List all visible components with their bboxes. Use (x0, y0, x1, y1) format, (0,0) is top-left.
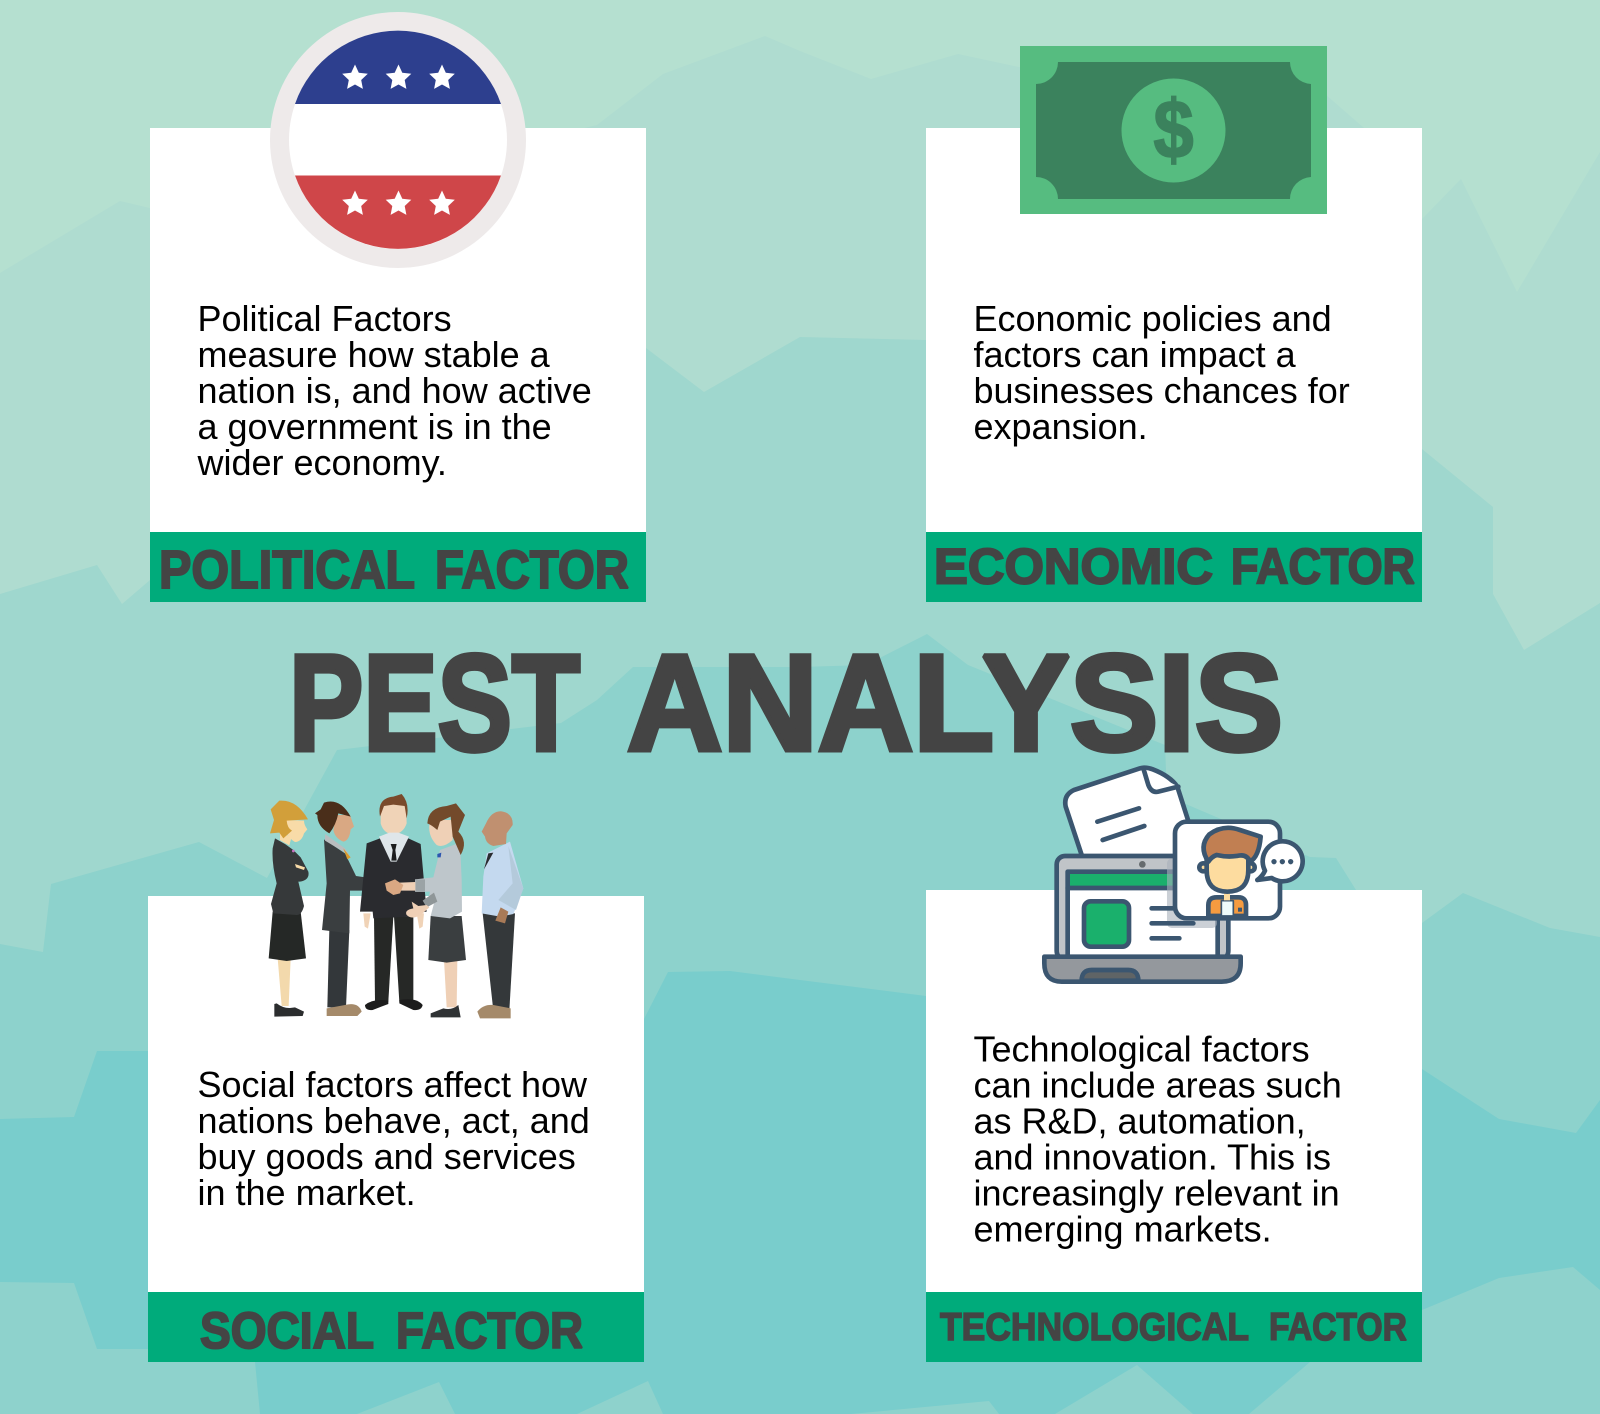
text: technological description: Technological factors (974, 1028, 1310, 1070)
title (289, 627, 1283, 780)
label bar: economic factor: FACTOR (1231, 538, 1415, 594)
label bar: social factor: FACTOR (396, 1302, 583, 1359)
text: political description: Political Factors (198, 298, 452, 339)
text: technological description: emerging markets. (974, 1208, 1272, 1250)
text: political description: nation is, and how active (198, 370, 592, 411)
label bar: economic factor (926, 532, 1422, 602)
speech bubble (1257, 841, 1303, 881)
text: technological description: and innovation. This is (974, 1136, 1331, 1178)
text: technological description: increasingly relevant in (974, 1172, 1340, 1214)
label bar: political factor: FACTOR (435, 540, 629, 600)
label bar: social factor: SOCIAL (200, 1302, 374, 1359)
icon: campaign badge with stars (270, 12, 526, 268)
person: blonde woman (269, 801, 309, 1017)
text: technological description: can include areas such (974, 1064, 1342, 1106)
text: economic description: businesses chances for (974, 370, 1350, 411)
icon: laptop, document and avatar (1044, 768, 1303, 982)
text: economic description: expansion. (974, 406, 1148, 447)
hands shaking (385, 879, 403, 895)
label bar: political factor (150, 532, 646, 602)
laptop (1044, 856, 1241, 982)
label bar: technological factor: TECHNOLOGICAL (940, 1306, 1249, 1349)
label bar: social factor (148, 1292, 644, 1362)
text: political description: wider economy. (196, 442, 447, 483)
icon: dollar bill: $ (1153, 84, 1194, 176)
person: woman with ponytail (400, 803, 466, 1017)
icon: group of business people shaking hands (269, 794, 523, 1018)
person: man in suit, centre (360, 794, 427, 1010)
text: technological description: as R&D, automation, (974, 1100, 1306, 1142)
label bar: technological factor: FACTOR (1269, 1306, 1407, 1349)
title: ANALYSIS (627, 627, 1283, 780)
text: economic description: Economic policies and (974, 298, 1332, 339)
person: man in suit, left (315, 802, 386, 1016)
person: bald man in shirt (477, 811, 523, 1018)
document (1065, 768, 1197, 860)
avatar card (1175, 822, 1280, 918)
text: political description: a government is in the (198, 406, 552, 447)
title: PEST (289, 627, 580, 780)
text: economic description: factors can impact a (974, 334, 1297, 375)
label bar: political factor: POLITICAL (159, 540, 415, 600)
text: political description: measure how stable a (198, 334, 551, 375)
label bar: economic factor: ECONOMIC (934, 538, 1213, 594)
text: social description: in the market. (198, 1172, 416, 1213)
panel: social factor (148, 794, 644, 1362)
panel: technological factor (926, 768, 1422, 1362)
panel: political factor (150, 12, 646, 602)
icon: dollar bill (1020, 46, 1327, 214)
text: social description: Social factors affect how (198, 1064, 588, 1105)
text: social description: buy goods and services (198, 1136, 576, 1177)
panel: economic factor (926, 46, 1422, 602)
label bar: technological factor (926, 1292, 1422, 1362)
text: social description: nations behave, act, and (198, 1100, 590, 1141)
